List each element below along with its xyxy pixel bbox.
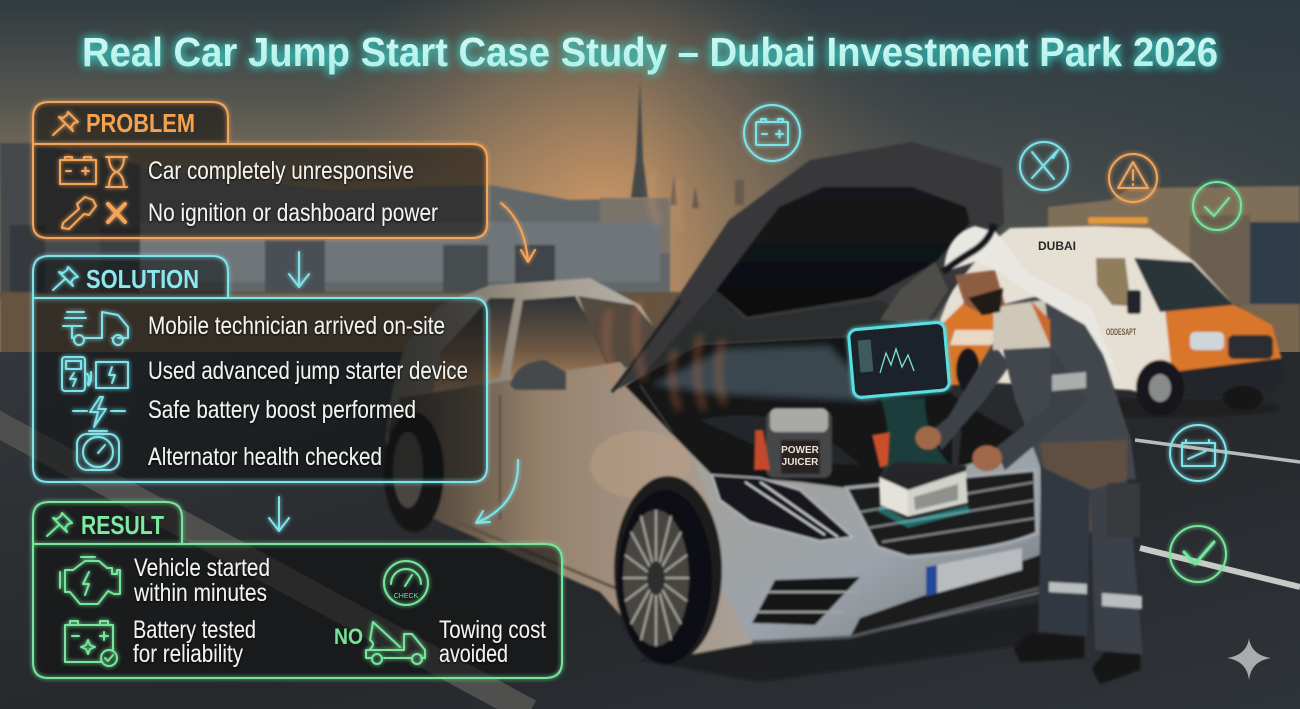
roof and cabin xyxy=(385,278,680,470)
face xyxy=(955,270,1005,315)
door mirror xyxy=(510,360,566,390)
solution text: Used advanced jump starter device xyxy=(148,357,468,385)
icon: tow truck xyxy=(366,622,425,664)
headlight xyxy=(712,475,852,541)
solution text: Mobile technician arrived on-site xyxy=(148,312,445,340)
technician xyxy=(915,224,1143,684)
sand strip xyxy=(0,292,680,354)
floating icon: battery test xyxy=(1170,425,1226,481)
result panel background xyxy=(33,502,562,678)
result panel outline xyxy=(33,502,562,678)
title: Real Car Jump Start Case Study – Dubai Investment Park 2026 xyxy=(82,29,1218,75)
result text: avoided xyxy=(439,640,508,668)
jump starter label: JUICER xyxy=(782,457,819,468)
problem panel background xyxy=(33,102,487,238)
hands xyxy=(915,426,941,450)
Burj tower skyline xyxy=(631,80,744,208)
right building xyxy=(1040,186,1300,330)
road surface xyxy=(0,352,1300,709)
legs xyxy=(1038,467,1090,636)
problem text: Car completely unresponsive xyxy=(148,157,414,185)
service van xyxy=(940,217,1282,417)
icon: gauge xyxy=(77,431,119,470)
panel: solution xyxy=(33,256,487,482)
arrow: orange curve xyxy=(501,203,535,262)
icon: pin xyxy=(53,267,78,290)
icon: engine xyxy=(60,557,120,604)
lower air intake xyxy=(752,577,860,625)
icon: battery check xyxy=(65,621,117,666)
floating icon: green check lower xyxy=(1170,526,1226,582)
engine bay dark area xyxy=(625,335,1035,490)
icon: charger and battery xyxy=(62,357,128,391)
problem panel outline xyxy=(33,102,487,238)
van lettering: DUBAI xyxy=(1038,239,1076,253)
solution panel background xyxy=(33,256,487,482)
solution text: Safe battery boost performed xyxy=(148,396,416,424)
license plate xyxy=(926,548,1022,596)
jump starter label: POWER xyxy=(781,445,820,456)
result text: within minutes xyxy=(133,579,267,607)
left warehouse buildings xyxy=(0,143,670,300)
headscarf xyxy=(944,226,1122,385)
floating icon: tools xyxy=(1020,142,1068,190)
arrow: solution to result xyxy=(269,497,289,531)
jump starter device xyxy=(754,408,832,478)
icon: pin xyxy=(53,112,78,135)
floating icon: battery xyxy=(744,105,800,161)
solution heading: SOLUTION xyxy=(86,264,199,294)
result text: Towing cost xyxy=(439,616,546,644)
icon: van xyxy=(63,312,128,345)
boots xyxy=(1014,633,1084,662)
problem text: No ignition or dashboard power xyxy=(148,199,438,227)
result text: Vehicle started xyxy=(134,554,270,582)
label: NO: NO xyxy=(334,624,363,649)
result text: for reliability xyxy=(133,640,243,668)
radiator grille xyxy=(846,470,1037,557)
floating icon: warning xyxy=(1109,154,1157,202)
jump starter label xyxy=(781,445,820,468)
panel: result xyxy=(33,502,562,678)
hologram beam xyxy=(880,398,955,478)
icon: bolt xyxy=(73,397,125,427)
icon: pin xyxy=(47,513,72,536)
far arm xyxy=(930,343,1010,450)
watermark sparkle xyxy=(1227,638,1271,680)
waist xyxy=(1040,440,1127,533)
white chest panel xyxy=(993,300,1050,350)
rear wheel xyxy=(384,412,444,532)
van lettering: ODDESAPT xyxy=(1106,327,1136,337)
car shadow xyxy=(640,600,1060,682)
icon: key and cross xyxy=(62,197,125,229)
arrow: problem to solution xyxy=(289,252,309,287)
icon: battery and hourglass xyxy=(60,157,127,187)
arrow: cyan curve xyxy=(476,460,518,523)
icon: check gauge: CHECK xyxy=(394,593,419,600)
solution text: Alternator health checked xyxy=(148,443,382,471)
lower grille xyxy=(850,552,1048,637)
windshield reflection xyxy=(650,345,880,402)
van lettering xyxy=(1038,239,1136,337)
heat wisps xyxy=(606,170,724,410)
front wheel xyxy=(614,476,722,664)
result heading: RESULT xyxy=(81,510,164,540)
panel: problem xyxy=(33,102,487,238)
problem heading: PROBLEM xyxy=(86,108,195,138)
reflective bands xyxy=(1049,582,1142,609)
road markings xyxy=(0,420,1300,709)
near arm xyxy=(995,345,1088,470)
silver sedan xyxy=(384,278,1060,682)
torso xyxy=(993,293,1136,480)
diagnostic tablet xyxy=(848,322,950,398)
solution panel outline xyxy=(33,256,487,482)
floating icon: green check xyxy=(1193,182,1241,230)
result text: Battery tested xyxy=(133,616,256,644)
front nose and bumper xyxy=(690,440,1046,642)
open hood xyxy=(611,142,1004,432)
car battery xyxy=(872,430,970,528)
car body side xyxy=(388,362,770,660)
icon: check gauge xyxy=(384,561,428,605)
